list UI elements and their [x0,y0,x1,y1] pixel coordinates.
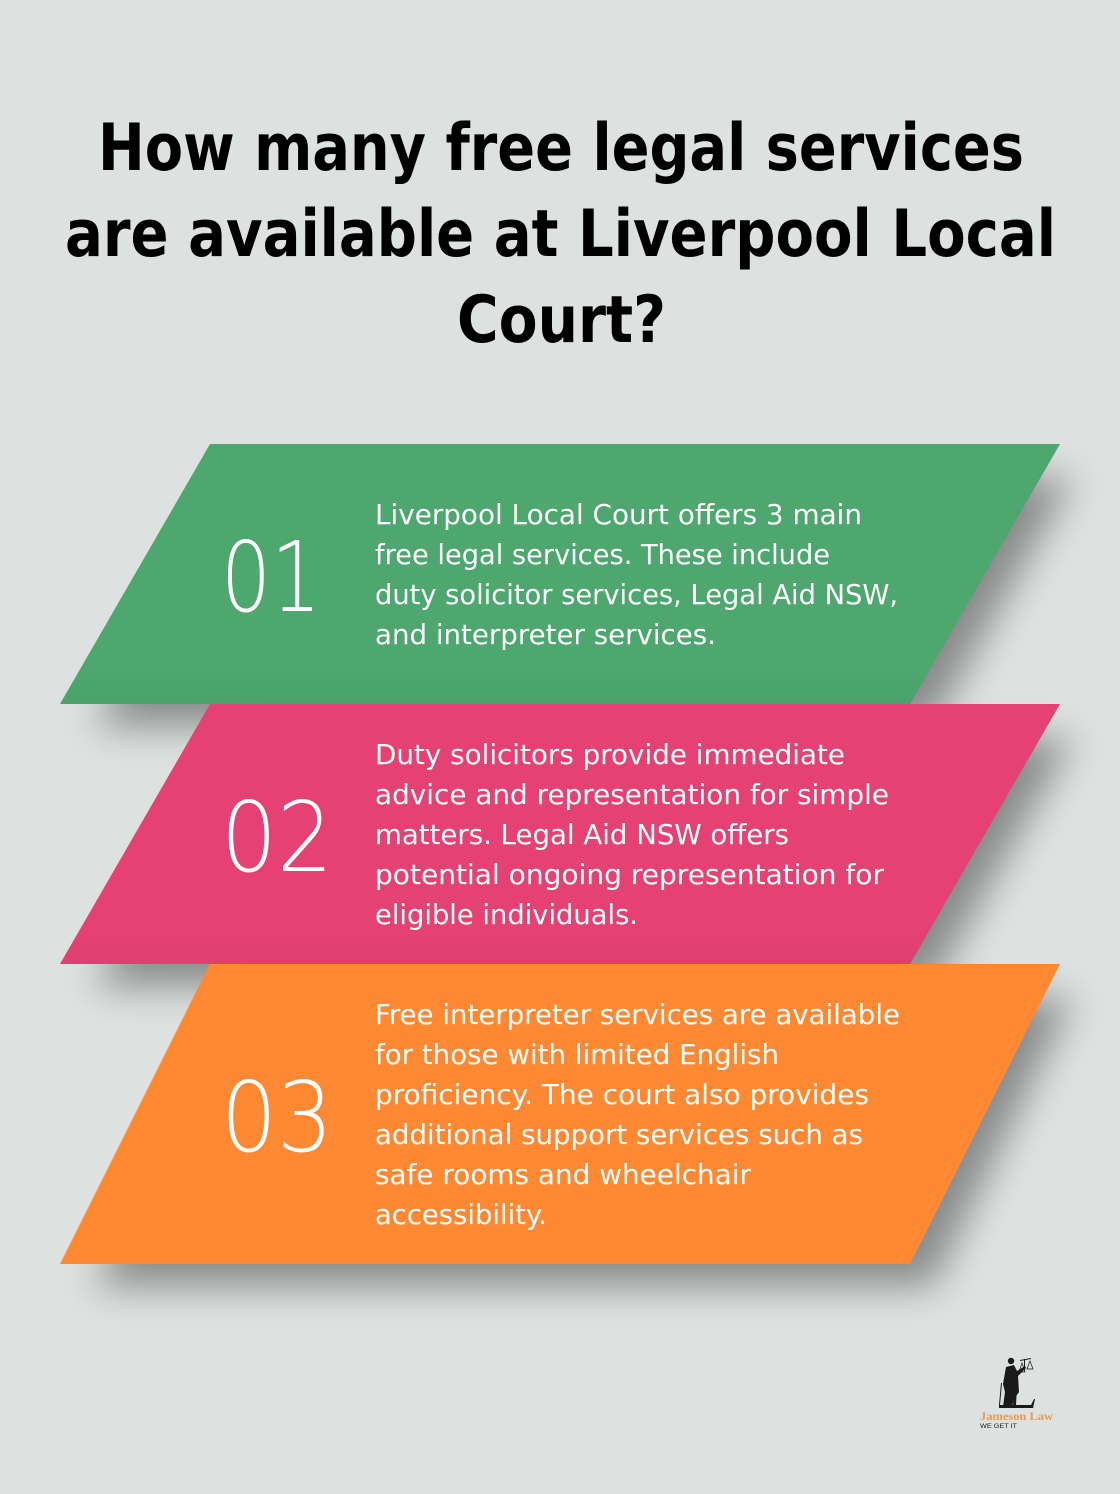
text: step 02: eligible individuals. [375,898,638,931]
title: Court? [457,283,666,358]
text: step 02: Duty solicitors provide immediate [375,738,845,771]
text: step 02 [375,738,889,931]
text: step 03: Free interpreter services are available [375,998,900,1031]
text: step 02: advice and representation for simple [375,778,889,811]
number 01: 01 [221,521,321,634]
logo: Jameson Law [980,1358,1054,1430]
text: step 01: Liverpool Local Court offers 3 main [375,498,862,531]
text: step 01: free legal services. These include [375,538,830,571]
logo: Jameson Law: Jameson Law [980,1411,1054,1423]
title [65,111,1056,358]
text: step 01 [375,498,898,651]
icon: lady justice [999,1358,1035,1408]
text: step 01: duty solicitor services, Legal Aid NSW, [375,578,898,611]
panel: step 01 [60,444,1072,726]
text: step 02: potential ongoing representation for [375,858,884,891]
number 02: 02 [221,781,333,894]
number 03: 03 [221,1061,333,1174]
text: step 03 [375,998,900,1231]
text: step 03: proficiency. The court also provides [375,1078,869,1111]
text: step 03: for those with limited English [375,1038,779,1071]
panel: step 03 [60,964,1072,1286]
panel: step 02 [60,704,1072,986]
text: step 03: additional support services such as [375,1118,863,1151]
text: step 02: matters. Legal Aid NSW offers [375,818,789,851]
text: step 01: and interpreter services. [375,618,716,651]
logo: Jameson Law: WE GET IT [980,1423,1017,1430]
text: step 03: accessibility. [375,1198,547,1231]
text: step 03: safe rooms and wheelchair [375,1158,751,1191]
